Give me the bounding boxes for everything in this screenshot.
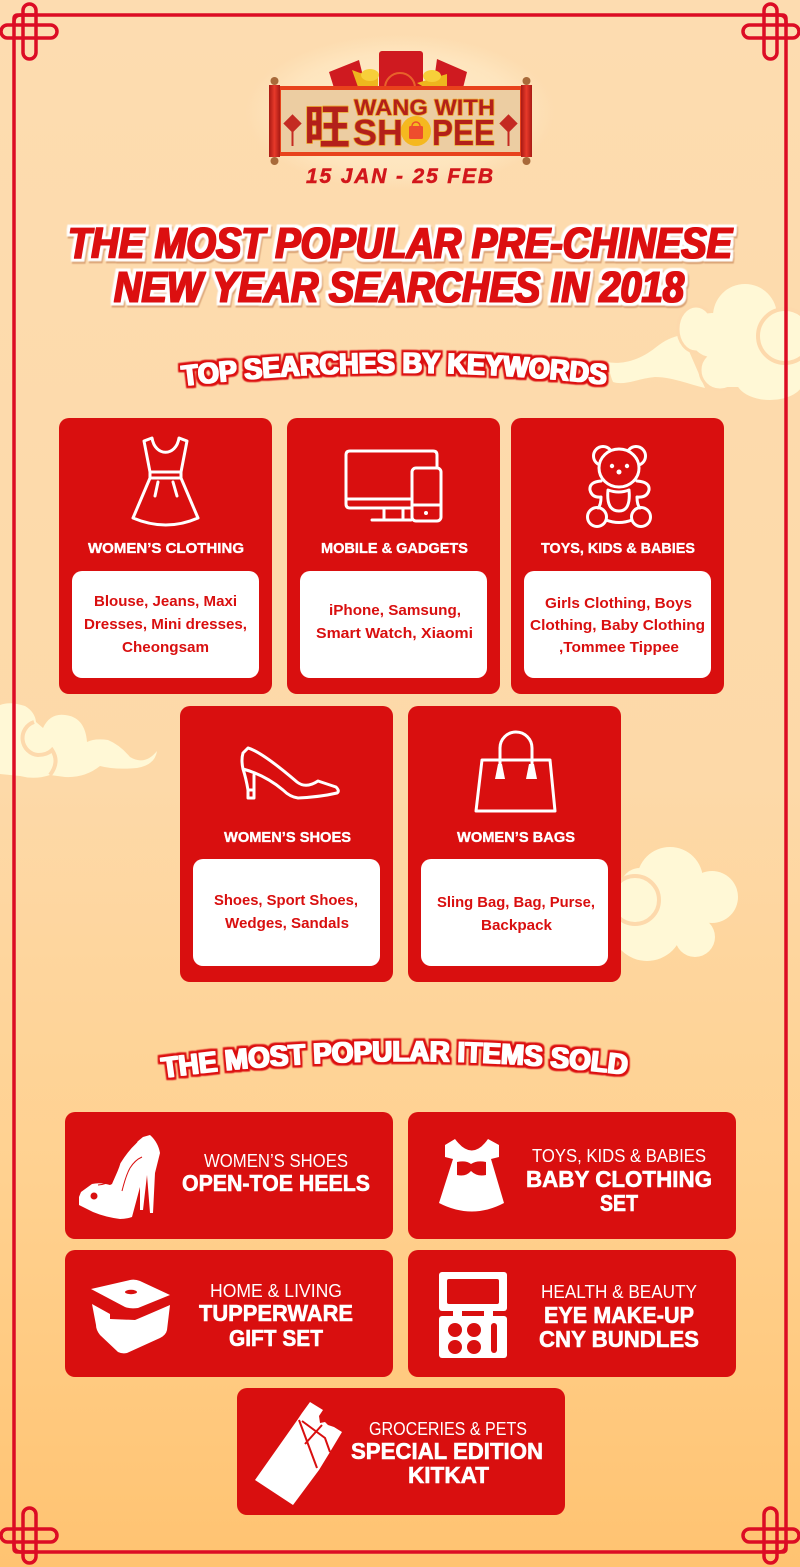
icon: baby dress (439, 1139, 504, 1212)
item label (539, 1282, 699, 1352)
title (68, 219, 733, 312)
logo line one: WANG WITH (354, 95, 495, 120)
panel: mobile and gadgets (287, 418, 500, 694)
keywords (437, 894, 595, 934)
keywords: Sling Bag, Bag, Purse, (437, 894, 595, 911)
item label: TOYS, KIDS & BABIES (532, 1146, 706, 1166)
icon: handbag (476, 732, 555, 811)
item label: SPECIAL EDITION (351, 1438, 543, 1464)
item label (526, 1146, 712, 1216)
item label (199, 1281, 353, 1351)
icon: Chinese knots (283, 114, 518, 146)
cloud: middle right (611, 847, 738, 961)
card title: TOYS, KIDS & BABIES (541, 540, 695, 557)
item label: HOME & LIVING (210, 1281, 342, 1301)
keywords: Clothing, Baby Clothing (530, 617, 705, 634)
corner knot: top right (743, 4, 799, 59)
keywords: Dresses, Mini dresses, (84, 616, 247, 633)
card title: WOMEN’S BAGS (457, 829, 575, 846)
logo line two end: PEE (432, 112, 495, 153)
icon: high heel (79, 1135, 160, 1219)
icon: monitor and phone (346, 451, 441, 521)
keywords (84, 593, 247, 656)
item label (182, 1151, 370, 1196)
keywords (316, 602, 473, 642)
heading: top searches by keywords: TOP SEARCHES BY KEYWORDS (177, 348, 610, 389)
logo: Bi Wang with Shopee (245, 34, 555, 190)
keyword box (72, 571, 259, 678)
scroll rods (269, 77, 532, 165)
keywords (214, 892, 358, 932)
panel: special edition kitkat (237, 1388, 565, 1515)
panel: eye make-up cny bundles (408, 1250, 736, 1377)
keywords: Smart Watch, Xiaomi (316, 625, 473, 642)
corner knot: top left (1, 4, 57, 59)
keyword box (193, 859, 380, 966)
item label: TUPPERWARE (199, 1300, 353, 1326)
icon: teddy bear (588, 446, 650, 526)
banner (279, 88, 522, 154)
icon: court shoe (242, 748, 338, 798)
item label: GROCERIES & PETS (369, 1419, 527, 1439)
panel: women's clothing (59, 418, 272, 694)
cloud: top right (607, 284, 800, 400)
date: 15 JAN - 25 FEB (306, 165, 493, 188)
keywords: Cheongsam (122, 639, 209, 656)
heading: the most popular items sold: THE MOST POPULAR ITEMS SOLD (156, 1037, 631, 1081)
icon: shopee bag coin (401, 116, 431, 146)
keyword box (421, 859, 608, 966)
keywords: Blouse, Jeans, Maxi (94, 593, 237, 610)
card title: WOMEN’S CLOTHING (88, 540, 244, 557)
cloud: middle left (0, 703, 157, 778)
item label: HEALTH & BEAUTY (541, 1282, 697, 1302)
keywords: Wedges, Sandals (225, 915, 349, 932)
corner knot: bottom right (743, 1508, 799, 1563)
keywords: Backpack (481, 917, 553, 934)
item label: GIFT SET (229, 1325, 323, 1351)
icon: dress (133, 438, 198, 525)
title: NEW YEAR SEARCHES IN 2018 (114, 263, 684, 312)
icon: chocolate bar (255, 1402, 342, 1505)
panel: tupperware gift set (65, 1250, 393, 1377)
panel: open-toe heels (65, 1112, 393, 1239)
item label: OPEN-TOE HEELS (182, 1170, 370, 1196)
icon: makeup palette (439, 1272, 507, 1358)
keywords (530, 595, 705, 656)
item label: CNY BUNDLES (539, 1326, 699, 1352)
item label: SET (600, 1190, 638, 1216)
panel: toys, kids and babies (511, 418, 724, 694)
icon: red envelopes and gold ingots (329, 51, 467, 89)
item label (351, 1419, 543, 1488)
item label: BABY CLOTHING (526, 1166, 712, 1192)
panel: women's shoes (180, 706, 393, 982)
logo line two start: SH (353, 112, 403, 153)
panel: baby clothing set (408, 1112, 736, 1239)
keyword box (300, 571, 487, 678)
keywords: ,Tommee Tippee (559, 639, 679, 656)
panel: women's bags (408, 706, 621, 982)
corner knot: bottom left (1, 1508, 57, 1563)
icon: food container (91, 1280, 170, 1353)
item label: EYE MAKE-UP (544, 1302, 694, 1328)
keywords: Shoes, Sport Shoes, (214, 892, 358, 909)
keywords: Girls Clothing, Boys (545, 595, 692, 612)
card title: MOBILE & GADGETS (321, 540, 468, 557)
keyword box (524, 571, 711, 678)
logo character: 旺 (304, 102, 350, 155)
item label: WOMEN’S SHOES (204, 1151, 348, 1171)
item label: KITKAT (408, 1462, 489, 1488)
card title: WOMEN’S SHOES (224, 829, 351, 846)
keywords: iPhone, Samsung, (329, 602, 461, 619)
